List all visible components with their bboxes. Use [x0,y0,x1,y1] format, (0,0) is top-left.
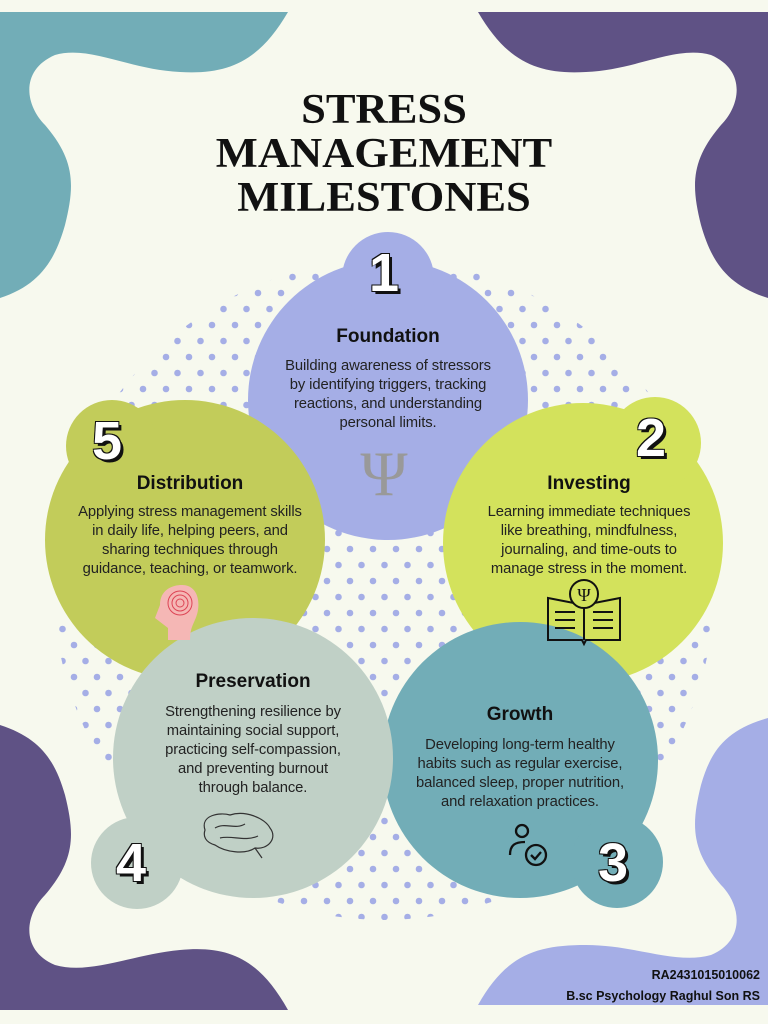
title: MANAGEMENT [216,131,552,177]
number 5: 5 [92,411,122,471]
panel: distribution [78,473,302,577]
corner: bottom-left purple [0,725,288,1010]
panel: preservation [165,671,341,796]
panel: investing: journaling, and time-outs to [501,542,677,558]
number 3: 3 [598,833,628,893]
panel: preservation: practicing self-compassion, [165,742,341,758]
panel: growth: Growth [487,704,553,725]
corner: top-right purple [478,12,768,298]
number 2: 2 [636,408,666,468]
panel: investing: Investing [547,473,631,494]
dotted background [54,260,714,920]
panel: investing: like breathing, mindfulness, [501,523,677,539]
credits [566,968,760,1003]
title [216,87,552,221]
panel: growth: and relaxation practices. [441,794,599,810]
panel: growth: habits such as regular exercise, [418,756,622,772]
number 1: 1 [369,243,399,303]
panel: preservation: maintaining social support, [167,723,339,739]
circle 3 [382,622,663,908]
title: MILESTONES [237,175,531,221]
credits: RA2431015010062 [652,968,760,982]
panel: foundation: Foundation [336,326,440,347]
panel: growth: balanced sleep, proper nutrition, [416,775,624,791]
panel: distribution: sharing techniques through [102,542,278,558]
panel: foundation: by identifying triggers, tracking [290,377,486,393]
icon: head [155,585,198,640]
icon: brain [204,813,273,858]
panel: growth: Developing long-term healthy [425,737,615,753]
panel: distribution: guidance, teaching, or teamwork. [83,561,297,577]
panel: foundation [285,326,491,431]
panel: preservation: Preservation [195,671,311,692]
icon: psi: Ψ [360,438,408,509]
panel: foundation: Building awareness of stressors [285,358,491,374]
panel: growth [416,704,624,810]
panel: distribution: Applying stress management skills [78,504,302,520]
circle 4 [91,618,393,909]
icon: book [548,580,620,644]
corner: top-left teal [0,12,288,298]
circle 2 [443,397,723,683]
credits: B.sc Psychology Raghul Son RS [566,989,760,1003]
number 4: 4 [116,833,146,893]
panel: foundation: personal limits. [339,415,437,431]
panel: foundation: reactions, and understanding [294,396,482,412]
icon: book: Ψ [577,585,591,605]
panel: preservation: through balance. [199,780,307,796]
panel: investing: manage stress in the moment. [491,561,687,577]
panel: distribution: in daily life, helping peers, and [92,523,288,539]
icon: person check [510,825,546,865]
circle 1 [248,232,528,540]
panel: investing: Learning immediate techniques [488,504,690,520]
corner: bottom-right lavender [478,718,768,1005]
panel: investing [488,473,690,577]
circle 5 [45,400,325,680]
panel: preservation: and preventing burnout [178,761,328,777]
title: STRESS [301,87,467,133]
panel: preservation: Strengthening resilience by [165,704,341,720]
panel: distribution: Distribution [137,473,243,494]
